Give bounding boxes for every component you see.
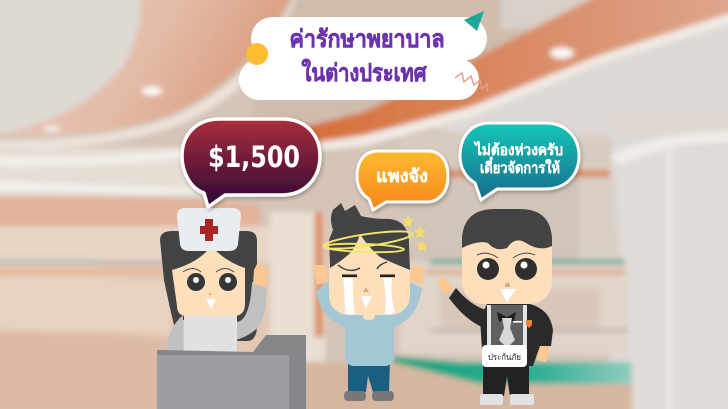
nurse hair xyxy=(160,231,257,341)
man body xyxy=(345,305,394,366)
title text: ในต่างประเทศ xyxy=(302,58,427,87)
man head xyxy=(329,225,410,315)
agent jacket xyxy=(480,304,546,366)
nurse raised arm xyxy=(236,264,268,340)
agent shoes xyxy=(480,394,534,405)
nurse eyes xyxy=(183,268,237,291)
speech bubble: too expensive: แพงจัง xyxy=(376,166,428,186)
speech bubble: price: $1,500 xyxy=(208,140,300,174)
nurse body xyxy=(184,312,237,356)
man pants xyxy=(348,360,390,392)
nurse xyxy=(160,208,268,356)
speech bubble: reassurance xyxy=(460,123,579,200)
yellow dot xyxy=(246,43,268,65)
nurse face xyxy=(172,246,245,316)
title banner xyxy=(239,11,487,100)
man shoes xyxy=(344,391,394,401)
man arms and hands xyxy=(313,265,424,327)
speech bubble: reassurance: ไม่ต้องห่วงครับ xyxy=(473,140,563,159)
nurse left sleeve xyxy=(166,315,183,352)
agent badge: ประกันภัย xyxy=(488,352,521,362)
agent mouth xyxy=(500,289,516,302)
teal triangle xyxy=(464,11,484,31)
speech bubble: too expensive xyxy=(357,151,448,210)
man face features xyxy=(338,262,395,314)
dizzy halo and stars xyxy=(323,215,427,253)
title text xyxy=(290,26,444,87)
agent hair xyxy=(462,209,552,249)
agent pants xyxy=(483,362,529,396)
agent head xyxy=(462,222,552,304)
agent shirt and tie xyxy=(487,305,532,348)
speech bubble: price xyxy=(182,119,320,207)
insurance agent xyxy=(438,209,553,405)
agent arms xyxy=(438,277,553,362)
title text: ค่ารักษาพยาบาล xyxy=(290,26,444,53)
worried man xyxy=(313,203,427,401)
speech bubble: reassurance: เดี๋ยวจัดการให้ xyxy=(480,156,560,177)
nurse mouth xyxy=(206,299,216,309)
nurse cap xyxy=(177,208,241,251)
reception desk xyxy=(157,335,306,409)
agent eyes xyxy=(477,253,537,280)
man hair xyxy=(329,203,410,270)
agent badge xyxy=(482,345,527,367)
pink zigzag xyxy=(455,73,487,92)
